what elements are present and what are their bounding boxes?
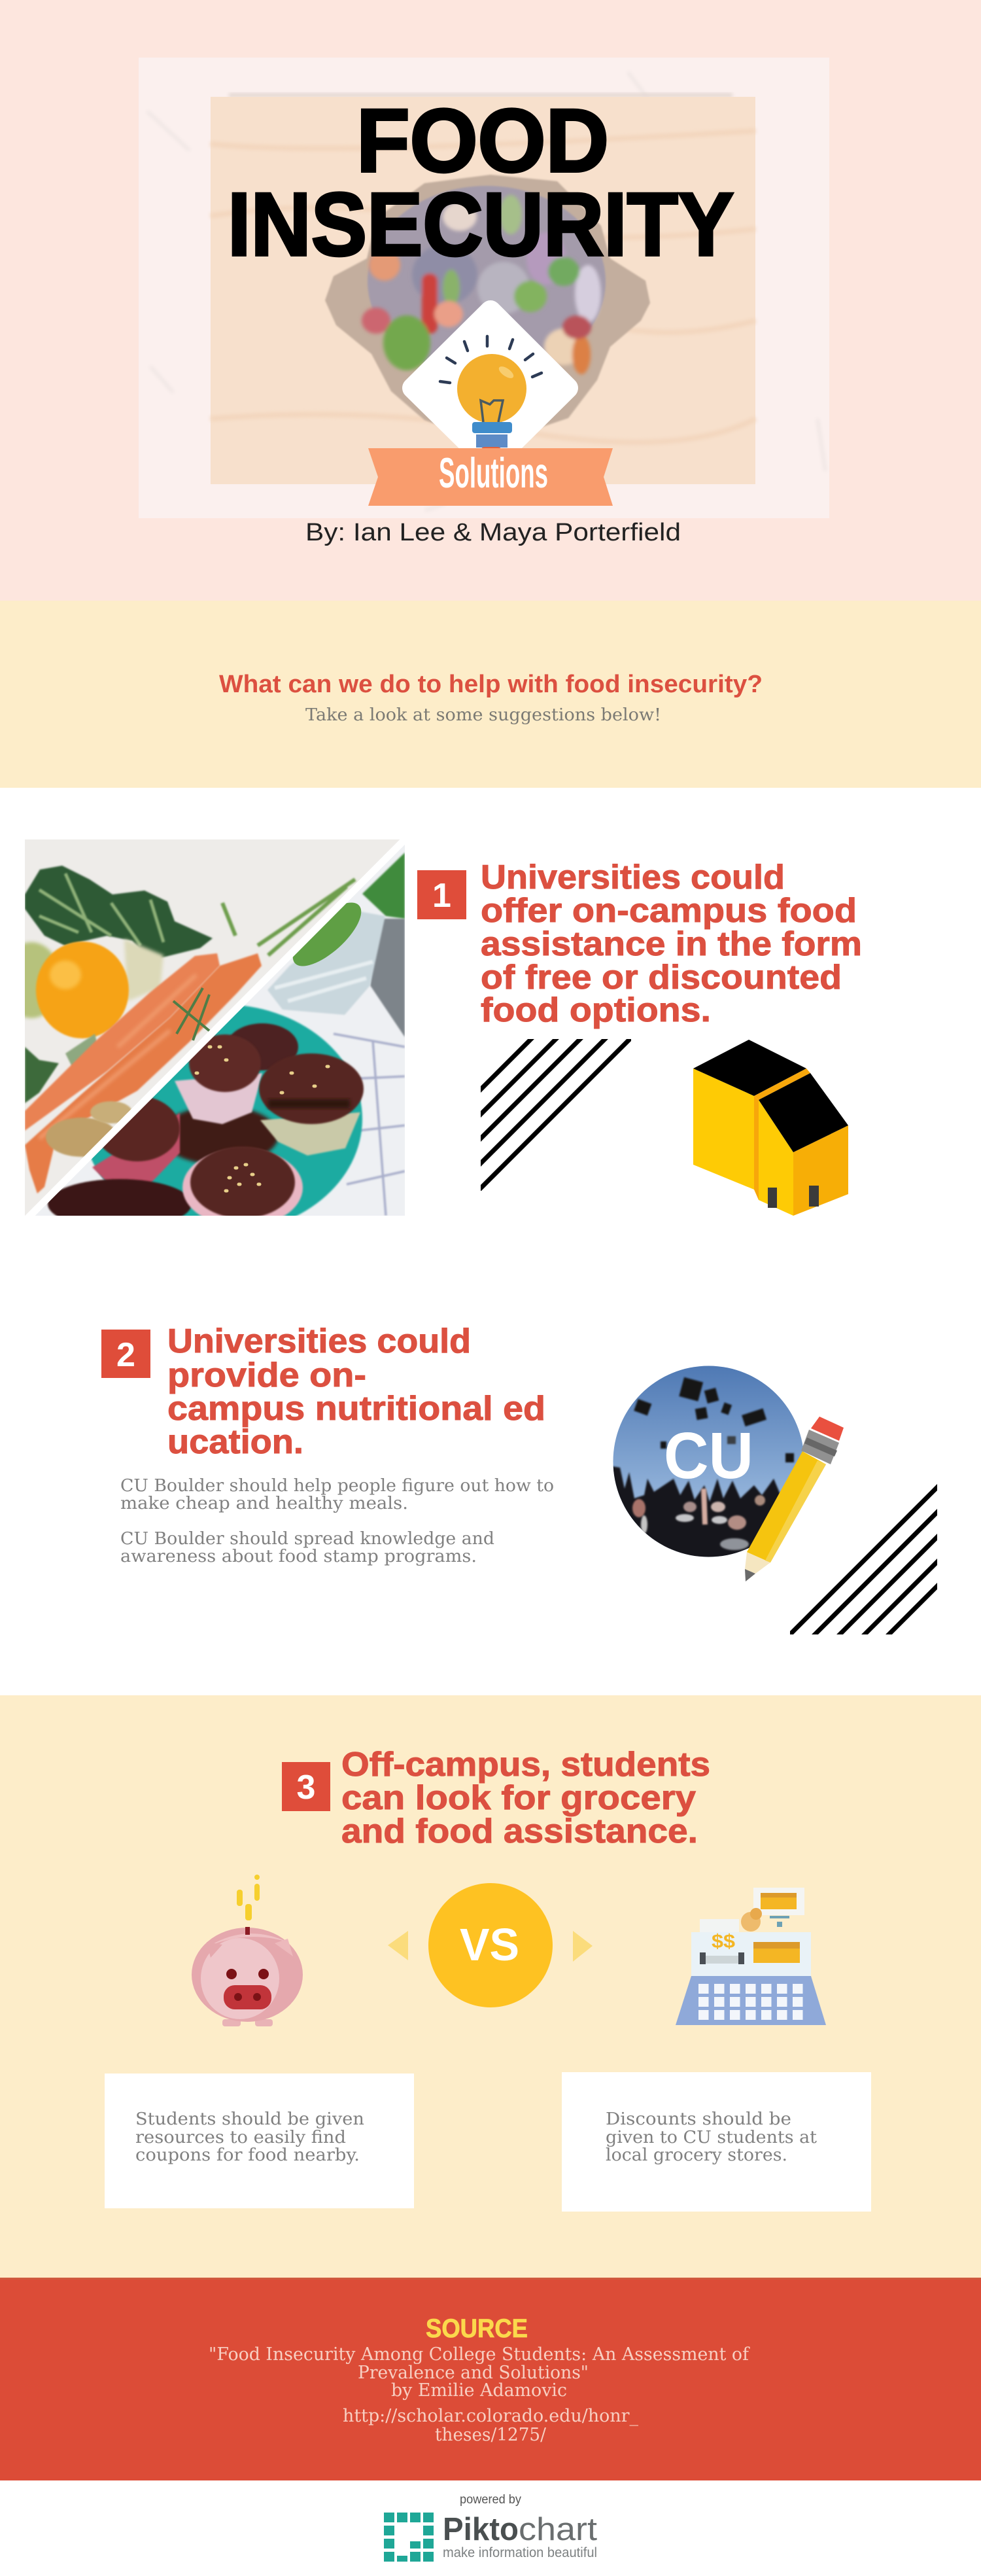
logo wordmark: make information beautiful [443,2545,597,2560]
section 1 heading: food options. [481,991,711,1029]
title: INSECURITY [228,175,734,275]
source citation: http://scholar.colorado.edu/honr_ [343,2406,638,2426]
section 3 badge [282,1762,330,1811]
card: coupons: resources to easily find [135,2128,346,2147]
icon: cash register [676,1888,826,2025]
panel: intro band [0,601,981,788]
ribbon: Solutions: Solutions [439,449,548,497]
intro heading: What can we do to help with food insecurity? [219,671,763,698]
logo mark [384,2513,434,2562]
panel: hero background [0,0,981,601]
panel: white sections background [0,788,981,1695]
section 3 heading: and food assistance. [341,1812,698,1850]
section 2 body text: CU Boulder should spread knowledge and [120,1529,494,1549]
title: FOOD [356,91,609,191]
intro subheading: Take a look at some suggestions below! [305,705,661,725]
icon: right arrow [573,1931,593,1962]
card: coupons: Students should be given [135,2109,364,2129]
section 3 badge: 3 [297,1769,315,1807]
icon: left arrow [388,1931,408,1960]
photo: vegetables and muffins [25,839,405,1216]
section 3 heading [341,1746,710,1850]
card: discounts [562,2072,871,2212]
section 2 body text: CU Boulder should help people figure out how to [120,1476,554,1496]
section 3 heading: can look for grocery [341,1779,696,1817]
section 1 badge [417,870,466,919]
photo half: muffins [25,839,405,1233]
section 1 badge: 1 [432,877,451,915]
source citation: by Emilie Adamovic [391,2380,567,2401]
source citation: theses/1275/ [435,2425,547,2445]
photo half: vegetables [2,839,405,1220]
section 2 body text: make cheap and healthy meals. [120,1494,408,1513]
footer: powered by Piktochart [384,2493,597,2562]
hero image: marble and wood board [139,58,829,518]
panel: source [0,2278,981,2480]
card: discounts: given to CU students at [606,2128,818,2147]
icon: yellow buildings [693,1040,848,1216]
photo: graduates circle with CU [608,1366,804,1570]
card: coupons: coupons for food nearby. [135,2145,360,2165]
section 1 heading: offer on-campus food [481,892,857,930]
icon: cash register: $$ [712,1931,735,1952]
diagonal stripes 2 [790,1484,937,1634]
section 2 body text [120,1476,554,1566]
source heading: SOURCE [426,2314,528,2343]
section 1 heading: assistance in the form [481,925,862,963]
section 2 heading [167,1322,545,1461]
icon: light bulb on white diamond [413,311,568,465]
section 2 heading: campus nutritional ed [167,1390,545,1428]
section 3 heading: Off-campus, students [341,1746,710,1784]
diagonal stripes 1 [481,1039,631,1191]
section 2 badge: 2 [116,1336,135,1374]
card: coupons [105,2073,414,2208]
section 2 heading: provide on- [167,1356,366,1394]
section 1 heading: Universities could [481,858,785,896]
section 2 heading: ucation. [167,1423,303,1461]
source citation: "Food Insecurity Among College Students: An Assessment of [209,2344,750,2365]
logo wordmark [443,2512,597,2560]
logo wordmark: Pikto [443,2512,519,2547]
hero image: salad bowl [325,175,650,444]
photo: graduates circle with CU: CU [664,1419,753,1492]
icon: VS circle [428,1883,553,2007]
footer: powered by Piktochart: powered by [460,2493,521,2507]
section 1 heading: of free or discounted [481,959,842,997]
source citation: Prevalence and Solutions" [358,2363,589,2383]
panel: section 3 [0,1695,981,2278]
logo wordmark: chart [519,2512,597,2547]
section 2 heading: Universities could [167,1322,471,1360]
title [228,91,734,275]
section 2 badge [101,1330,150,1378]
ribbon: Solutions [368,448,613,506]
source citation [209,2344,750,2445]
section 1 heading [481,858,862,1029]
icon: VS circle: VS [460,1919,519,1970]
section 2 body text: awareness about food stamp programs. [120,1547,477,1566]
card: discounts: Discounts should be [606,2109,791,2129]
byline: By: Ian Lee & Maya Porterfield [305,519,681,546]
icon: piggy bank [192,1875,303,2026]
card: discounts: local grocery stores. [606,2145,787,2165]
icon: pencil [745,1417,844,1581]
